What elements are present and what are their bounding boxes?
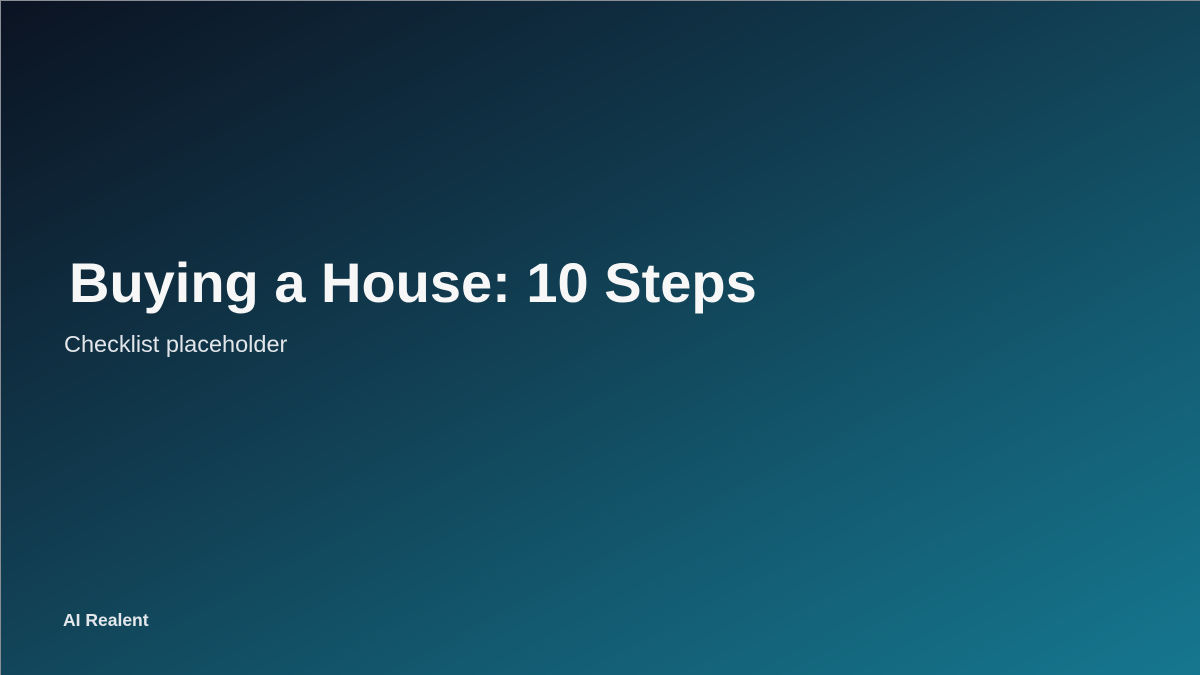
footer brand: AI Realent <box>63 610 149 630</box>
subtitle: Checklist placeholder <box>64 331 287 357</box>
title: Buying a House: 10 Steps <box>69 251 757 314</box>
